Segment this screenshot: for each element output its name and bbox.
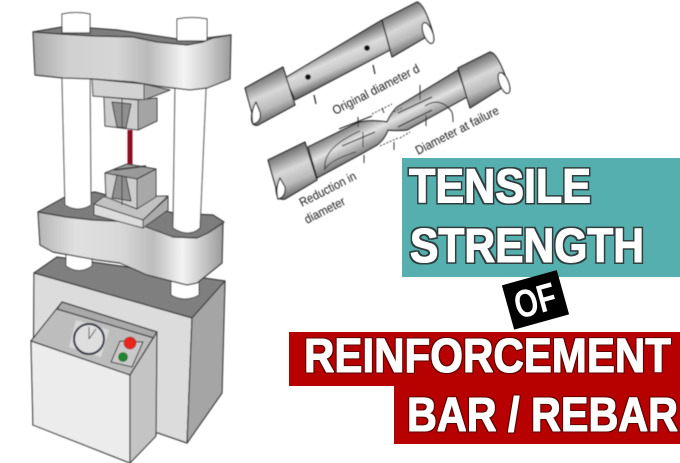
specimen diagram: [245, 2, 512, 227]
upper crosshead: [33, 27, 231, 90]
label: diameter at failure: Diameter at failure: [413, 103, 501, 158]
upper mounting block: [92, 79, 170, 100]
top column stubs: [62, 12, 207, 42]
left column: [62, 78, 91, 209]
heading: strength: STRENGTH: [410, 219, 644, 273]
unstressed specimen bar: [245, 2, 436, 125]
rebar specimen: [128, 130, 132, 171]
pressure gauge dial: [69, 320, 109, 357]
lower crosshead: [38, 192, 224, 285]
label: reduction in diameter: Reduction in: [297, 169, 359, 210]
label: reduction in diameter: [297, 169, 359, 227]
teal title panel: [402, 158, 680, 277]
lower jaw with wedge: [105, 164, 156, 209]
label: original diameter: Original diameter d: [330, 62, 422, 118]
heading: tensile: TENSILE: [409, 160, 591, 214]
upper jaw with wedge: [104, 97, 157, 130]
OF badge: [502, 270, 569, 330]
label: reduction in diameter: diameter: [302, 194, 348, 227]
control console: [31, 302, 157, 463]
control buttons: [111, 337, 143, 367]
right column: [173, 88, 206, 233]
base plate: [94, 196, 168, 228]
lower column stubs: [66, 252, 199, 299]
red title banner: [289, 330, 680, 444]
heading: of: OF: [509, 275, 561, 328]
necked specimen bar: [268, 52, 512, 199]
machine base cabinet: [33, 257, 225, 443]
tensile testing machine: [31, 12, 231, 463]
